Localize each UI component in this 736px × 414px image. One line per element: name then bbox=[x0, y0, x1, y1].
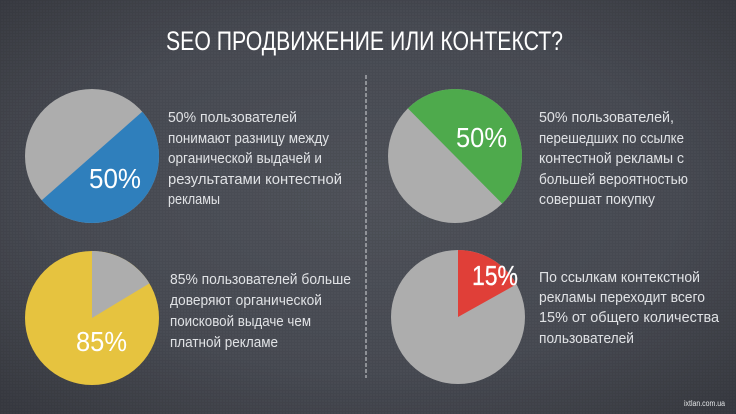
watermark: ixtlan.com.ua bbox=[684, 399, 725, 408]
panel: trust in organic search bbox=[25, 251, 351, 385]
text block: users trust organic results bbox=[170, 271, 351, 351]
text block: traffic from contextual ads: рекламы переходит всего bbox=[539, 289, 705, 306]
text block: users understand the difference: результатами контестной bbox=[168, 171, 342, 188]
panel: contextual ad traffic share bbox=[391, 250, 720, 384]
text block: users trust organic results: 85% пользователей больше bbox=[170, 271, 351, 288]
pie chart: 15% red bbox=[391, 250, 525, 384]
pie chart: 50% blue bbox=[25, 89, 159, 223]
text block: users more likely to purchase bbox=[539, 109, 688, 208]
pie chart: 85% yellow bbox=[25, 251, 159, 385]
text block: traffic from contextual ads: 15% от общего количества bbox=[539, 309, 720, 326]
pie value: 15%: 15% bbox=[472, 260, 518, 291]
text block: users more likely to purchase: перешедших по ссылке bbox=[539, 130, 684, 147]
pie chart: 50% green bbox=[388, 89, 522, 223]
panel: organic vs contextual understanding bbox=[25, 89, 341, 223]
text block: users understand the difference: понимают разницу между bbox=[168, 130, 329, 147]
pie value: 50%: 50% bbox=[89, 163, 141, 194]
text block: users more likely to purchase: совершат покупку bbox=[539, 191, 655, 208]
panel: contextual ad conversions bbox=[388, 89, 688, 223]
title: SEO ПРОДВИЖЕНИЕ ИЛИ КОНТЕКСТ? bbox=[166, 26, 563, 56]
text block: traffic from contextual ads bbox=[539, 269, 720, 347]
text block: users understand the difference bbox=[168, 109, 342, 208]
text block: users trust organic results: доверяют органической bbox=[170, 292, 322, 309]
pie value: 50%: 50% bbox=[456, 122, 507, 153]
text block: users more likely to purchase: большей вероятностью bbox=[539, 171, 688, 188]
pie value: 85%: 85% bbox=[76, 326, 127, 357]
text block: users more likely to purchase: контестной рекламы с bbox=[539, 150, 684, 167]
text block: users trust organic results: платной рекламе bbox=[170, 334, 278, 351]
text block: users understand the difference: органической выдачей и bbox=[168, 150, 322, 167]
text block: users trust organic results: поисковой выдаче чем bbox=[170, 313, 311, 330]
text block: traffic from contextual ads: пользователей bbox=[539, 330, 634, 347]
text block: users more likely to purchase: 50% пользователей, bbox=[539, 109, 674, 126]
text block: users understand the difference: 50% пользователей bbox=[168, 109, 297, 126]
text block: traffic from contextual ads: По ссылкам контекстной bbox=[539, 269, 700, 286]
text block: users understand the difference: рекламы bbox=[168, 191, 220, 208]
